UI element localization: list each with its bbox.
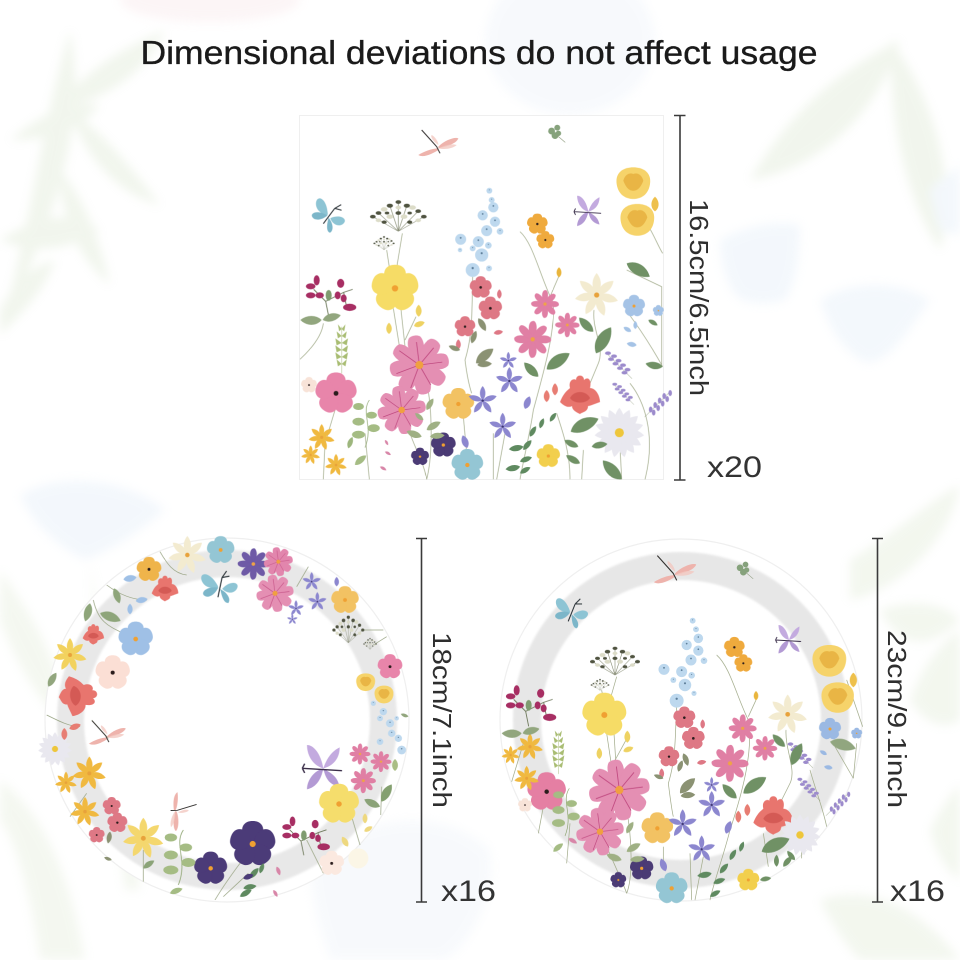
panel: large plate bbox=[500, 539, 863, 906]
napkin yellow poppies bbox=[557, 167, 659, 277]
large plate eucalyptus bbox=[552, 788, 580, 853]
large plate size label: 23cm/9.1inch bbox=[882, 630, 912, 808]
large plate fern bbox=[552, 731, 564, 774]
large plate grey rim bbox=[527, 566, 835, 874]
background: lower-left blossom and stalks bbox=[0, 481, 165, 960]
napkin teal flower bbox=[450, 449, 485, 482]
large plate rose flowers bbox=[658, 707, 707, 778]
napkin coral lily and buds bbox=[544, 375, 600, 414]
napkin lavender stems bbox=[605, 351, 672, 417]
small plate pink seedlings bbox=[272, 866, 282, 898]
napkin blue forget-me-nots bbox=[622, 295, 664, 348]
small plate pale pink blossom bbox=[94, 655, 132, 691]
small plate pink daisies bbox=[350, 744, 398, 810]
small plate quantity: x16 bbox=[441, 875, 496, 908]
large plate orange blossoms bbox=[723, 637, 753, 673]
large plate cream star flower bbox=[768, 695, 808, 734]
large plate orange and yellow flowers bbox=[640, 812, 761, 892]
small plate pink cosmos bbox=[256, 574, 294, 613]
napkin pink blossom bbox=[300, 372, 359, 416]
small plate purple stars bbox=[287, 572, 339, 624]
small plate magenta sprig bbox=[282, 817, 330, 855]
panel: napkin artwork bbox=[300, 116, 672, 484]
large plate coral lily and buds bbox=[735, 796, 793, 835]
small plate purple butterfly bbox=[302, 745, 342, 789]
napkin blue berries spike bbox=[455, 188, 503, 277]
large plate pink daisies bbox=[712, 714, 777, 782]
large plate umbels bbox=[590, 647, 640, 690]
napkin left leaves bbox=[300, 311, 342, 325]
napkin purple butterfly bbox=[574, 196, 601, 226]
napkin orange and yellow flowers bbox=[441, 388, 561, 469]
small plate pale blossom bbox=[318, 848, 368, 877]
small plate blue flowers bbox=[83, 574, 155, 658]
panel: small plate bbox=[38, 536, 409, 902]
large plate cosmos foliage bbox=[605, 820, 645, 863]
background: lower-right foliage bbox=[820, 485, 960, 960]
large plate clover sprig bbox=[737, 562, 753, 579]
napkin small yellow buds bbox=[386, 305, 426, 334]
napkin cosmos flowers bbox=[377, 334, 450, 435]
napkin dark violets bbox=[410, 432, 457, 466]
napkin cream star flower bbox=[574, 273, 619, 317]
small plate coral lily bbox=[57, 674, 99, 740]
napkin magenta sprig bbox=[306, 275, 356, 316]
small plate grey rim bbox=[70, 564, 384, 876]
large plate left leaves bbox=[502, 725, 540, 738]
small plate eucalyptus bbox=[163, 830, 195, 896]
small plate dark violets bbox=[192, 821, 278, 886]
large plate purple star flowers bbox=[658, 777, 734, 872]
small plate top blossoms bbox=[135, 536, 293, 601]
large plate quantity: x16 bbox=[890, 875, 945, 908]
large plate yellow buds bbox=[597, 731, 634, 759]
napkin arched green fern bbox=[505, 412, 558, 475]
large plate stems bbox=[512, 655, 863, 900]
napkin orange blossoms bbox=[526, 214, 555, 250]
napkin fern bbox=[335, 324, 348, 373]
small plate blue berries bbox=[371, 701, 406, 754]
small plate yellow flower bbox=[317, 784, 361, 826]
napkin size ruler bbox=[674, 116, 686, 480]
napkin rose flowers bbox=[454, 276, 503, 349]
napkin green leaves bbox=[521, 258, 663, 484]
large plate purple butterfly bbox=[775, 625, 801, 653]
background: bottom-centre blossom bbox=[310, 820, 492, 960]
large plate blue berries spike bbox=[658, 618, 707, 708]
napkin eucalyptus sprig bbox=[346, 400, 380, 467]
small plate size ruler bbox=[416, 538, 427, 902]
large plate white daisy bbox=[779, 814, 821, 856]
small plate lower-left flowers bbox=[88, 797, 164, 870]
small plate white daisy bbox=[38, 732, 72, 766]
small plate dragonflies bbox=[89, 721, 198, 834]
napkin cosmos foliage bbox=[405, 397, 445, 440]
large plate left blossoms bbox=[501, 733, 568, 813]
small plate orange star flowers bbox=[55, 756, 106, 826]
small plate yellow flower left bbox=[45, 638, 87, 688]
small plate yellow buds bbox=[340, 813, 374, 848]
napkin quantity: x20 bbox=[707, 451, 762, 484]
background: top-left foliage bbox=[0, 30, 165, 335]
napkin size label: 16.5cm/6.5inch bbox=[684, 199, 714, 396]
napkin pink seedling bbox=[379, 439, 392, 472]
napkin orange star flowers bbox=[301, 424, 347, 476]
small plate stems bbox=[47, 552, 387, 900]
napkin dragonfly bbox=[418, 130, 458, 156]
large plate olive leaves bbox=[653, 752, 698, 799]
napkin clover sprig bbox=[548, 125, 565, 142]
large plate yellow poppies bbox=[754, 645, 857, 713]
large plate dark violets bbox=[610, 856, 655, 889]
large plate cosmos flowers bbox=[575, 759, 651, 856]
small plate right blossoms bbox=[330, 586, 409, 718]
napkin umbels bbox=[370, 200, 427, 250]
background: top-centre blossoms bbox=[120, 0, 300, 22]
large plate yellow flower bbox=[580, 693, 629, 739]
large plate arched green fern bbox=[697, 841, 746, 899]
title: Dimensional deviations do not affect usage bbox=[140, 34, 818, 71]
large plate teal flower bbox=[654, 872, 689, 906]
napkin stems bbox=[300, 223, 663, 479]
large plate magenta sprig bbox=[506, 685, 556, 726]
small plate blue butterfly bbox=[200, 569, 240, 607]
large plate lavender bbox=[788, 742, 850, 816]
background: top-right blossoms and leaves bbox=[485, 0, 960, 362]
napkin olive leaves bbox=[448, 317, 496, 368]
napkin yellow flower bbox=[369, 265, 421, 314]
large plate blue butterfly bbox=[555, 598, 588, 628]
small plate green fern bbox=[238, 862, 266, 899]
large plate blue flowers bbox=[818, 718, 863, 770]
napkin blue butterfly bbox=[309, 197, 349, 236]
large plate size ruler bbox=[872, 538, 883, 902]
large plate dragonfly bbox=[654, 556, 696, 583]
napkin purple star flowers bbox=[460, 352, 533, 449]
large plate green leaves bbox=[719, 732, 857, 882]
napkin pink daisies bbox=[514, 290, 580, 358]
napkin white daisy bbox=[594, 408, 645, 458]
small plate size label: 18cm/7.1inch bbox=[427, 632, 457, 808]
small plate upper-left leaves bbox=[82, 587, 123, 625]
